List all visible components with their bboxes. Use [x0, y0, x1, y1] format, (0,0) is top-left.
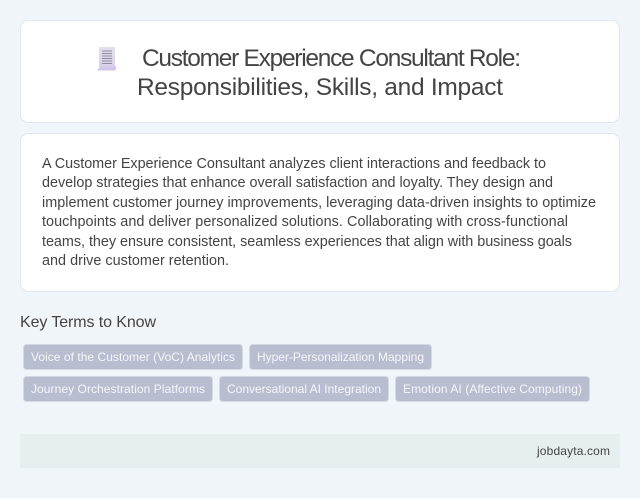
chip: hyper-personalization: [250, 344, 432, 370]
footer source: jobdayta.com: [536, 444, 610, 458]
chip: emotion AI: Emotion AI (Affective Computing): [403, 382, 582, 396]
panel: description: [20, 134, 620, 292]
description text: implement customer journey improvements, leveraging data-driven insights to optimize: [42, 195, 596, 211]
title: Responsibilities, Skills, and Impact: [137, 74, 503, 101]
chip: journey orchestration: [24, 376, 212, 402]
chip: emotion AI: [396, 376, 590, 402]
description text: teams, they ensure consistent, seamless experiences that align with business goals: [42, 234, 572, 250]
chip: conversational AI: [220, 376, 388, 402]
chip: voice of the customer: Voice of the Customer (VoC) Analytics: [31, 350, 235, 364]
footer: [20, 434, 620, 468]
chip: hyper-personalization: Hyper-Personalization Mapping: [257, 350, 424, 364]
description text: develop strategies that enhance overall satisfaction and loyalty. They design and: [42, 175, 553, 191]
title: Customer Experience Consultant Role:: [142, 45, 521, 72]
icon: document scroll: [97, 47, 116, 70]
description text: and drive customer retention.: [42, 253, 229, 269]
chip: voice of the customer: [24, 344, 242, 370]
panel: header: [20, 20, 620, 122]
key term chips: [24, 344, 590, 402]
heading: key terms: Key Terms to Know: [20, 314, 156, 331]
description text: A Customer Experience Consultant analyzes client interactions and feedback to: [42, 156, 546, 172]
title: [137, 45, 521, 101]
description text: touchpoints and deliver personalized solutions. Collaborating with cross-functional: [42, 214, 568, 230]
chip: journey orchestration: Journey Orchestration Platforms: [31, 382, 205, 396]
chip: conversational AI: Conversational AI Integration: [227, 382, 381, 396]
description text: [42, 156, 596, 269]
